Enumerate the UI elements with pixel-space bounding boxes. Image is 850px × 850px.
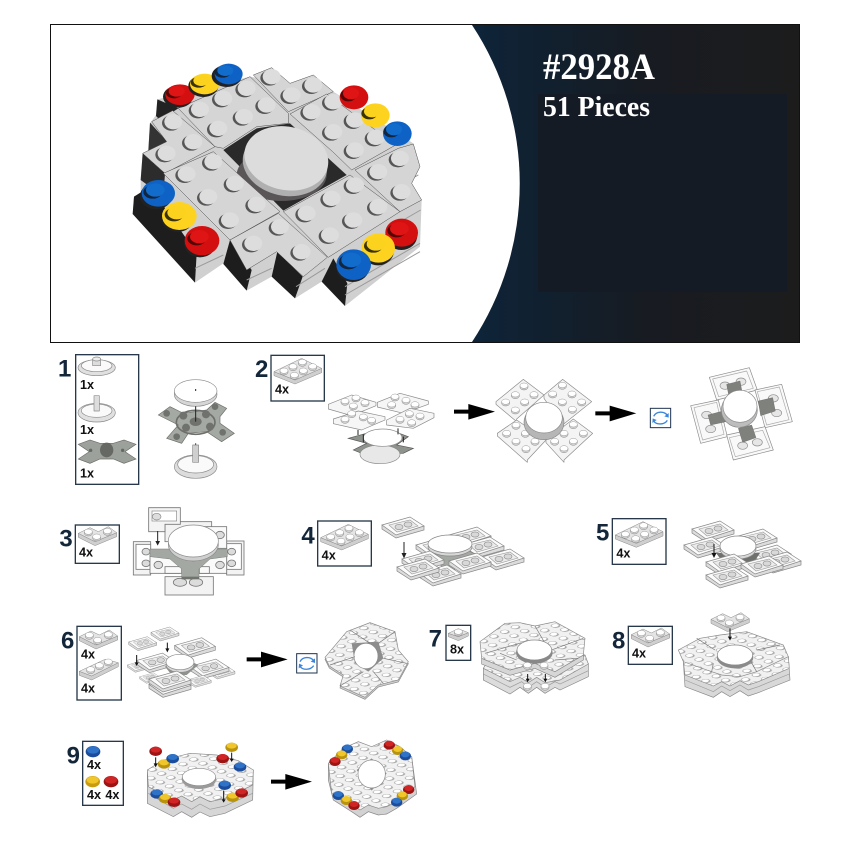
quantity: 1x — [80, 423, 94, 437]
part: yellow round plate — [85, 776, 100, 787]
step 2 flipped assembly — [691, 368, 792, 460]
hero model: brick fidget spinner — [133, 64, 422, 306]
step 1 parts box — [76, 355, 139, 484]
step 6 assembly — [127, 627, 235, 697]
step 1 number: 1 — [58, 355, 71, 382]
flip icon — [297, 654, 317, 673]
step 4 number: 4 — [301, 522, 315, 549]
coloured studs: left — [140, 180, 219, 257]
quantity: 4x — [616, 547, 630, 561]
piece count: 51 Pieces — [543, 92, 650, 123]
hero panel — [50, 24, 800, 342]
part: disc with stud — [78, 357, 115, 376]
step 9 assembly — [147, 743, 253, 817]
quantity: 1x — [80, 378, 94, 392]
part: disc with axle — [78, 396, 115, 422]
part: red round plate — [104, 776, 118, 787]
part: cross plate — [78, 440, 136, 463]
step 3 parts box — [75, 525, 119, 563]
dark inner rectangle — [538, 94, 787, 292]
step 9 finished model — [328, 740, 417, 817]
quantity: 4x — [79, 545, 93, 559]
coloured studs: top left — [163, 64, 243, 108]
step 8 number: 8 — [612, 627, 625, 654]
quantity: 4x — [87, 788, 101, 802]
step 5 assembly — [684, 521, 801, 588]
step 5 number: 5 — [596, 519, 609, 546]
step 2 exploded assembly — [328, 393, 434, 464]
step 2 assembled plates — [496, 379, 593, 462]
arrow — [247, 652, 288, 667]
step 7 assembly — [480, 622, 588, 694]
step 6 number: 6 — [61, 627, 74, 654]
model side walls — [133, 77, 422, 306]
part: blue round plate — [86, 746, 100, 757]
arrow — [454, 404, 495, 420]
step 4 parts box — [318, 521, 371, 566]
step 9 parts box — [83, 741, 123, 805]
arrow — [271, 774, 312, 790]
part: 1x3 plate — [79, 659, 118, 680]
part: L plate — [79, 630, 118, 649]
step 2 number: 2 — [255, 356, 268, 383]
quantity: 4x — [322, 549, 336, 563]
part: 2x3 plate — [274, 358, 322, 384]
step 6 parts box — [77, 626, 121, 700]
step 7 parts box — [446, 625, 471, 660]
part: L plate — [78, 527, 117, 546]
steps 1 to 4 left group — [58, 355, 434, 595]
quantity: 4x — [81, 647, 95, 661]
step 6 flipped assembly — [325, 623, 408, 699]
steps 6 and 9 (zoomed coordinates) — [61, 623, 417, 817]
spinner centre disc — [237, 119, 334, 204]
coloured studs: bottom right — [336, 219, 418, 282]
part: L plate — [631, 628, 670, 647]
arrow — [595, 406, 636, 421]
step 4 assembly — [382, 517, 524, 586]
coloured studs: top right — [340, 85, 412, 146]
quantity: 4x — [105, 788, 119, 802]
step 1 assembly — [158, 380, 234, 478]
quantity: 4x — [275, 383, 289, 397]
step 8 parts box — [628, 626, 672, 664]
white circular cut-out — [51, 25, 520, 342]
step 9 number: 9 — [67, 742, 80, 769]
step 3 assembly — [133, 508, 244, 595]
quantity: 8x — [450, 642, 464, 656]
step 5 parts box — [612, 519, 666, 564]
step 8 assembly — [678, 613, 790, 697]
quantity: 1x — [80, 466, 94, 480]
step 7 number: 7 — [429, 626, 442, 653]
plate studs — [155, 69, 411, 261]
flip icon — [650, 408, 671, 428]
top plates — [143, 68, 422, 277]
step 2 parts box — [271, 355, 324, 401]
quantity: 4x — [632, 646, 646, 660]
quantity: 4x — [81, 681, 95, 695]
product title: #2928A — [543, 47, 655, 88]
steps 7 and 8 (zoomed coordinates) — [429, 613, 790, 697]
step 2 flat assembly and flip (zoomed coordinates) — [454, 368, 792, 564]
part: 2x3 plate — [615, 522, 663, 547]
part: 2x3 plate — [321, 524, 368, 550]
quantity: 4x — [87, 758, 101, 772]
part: 1x2 plate — [448, 629, 468, 641]
step 3 number: 3 — [59, 526, 73, 553]
central hub recess — [223, 123, 347, 211]
